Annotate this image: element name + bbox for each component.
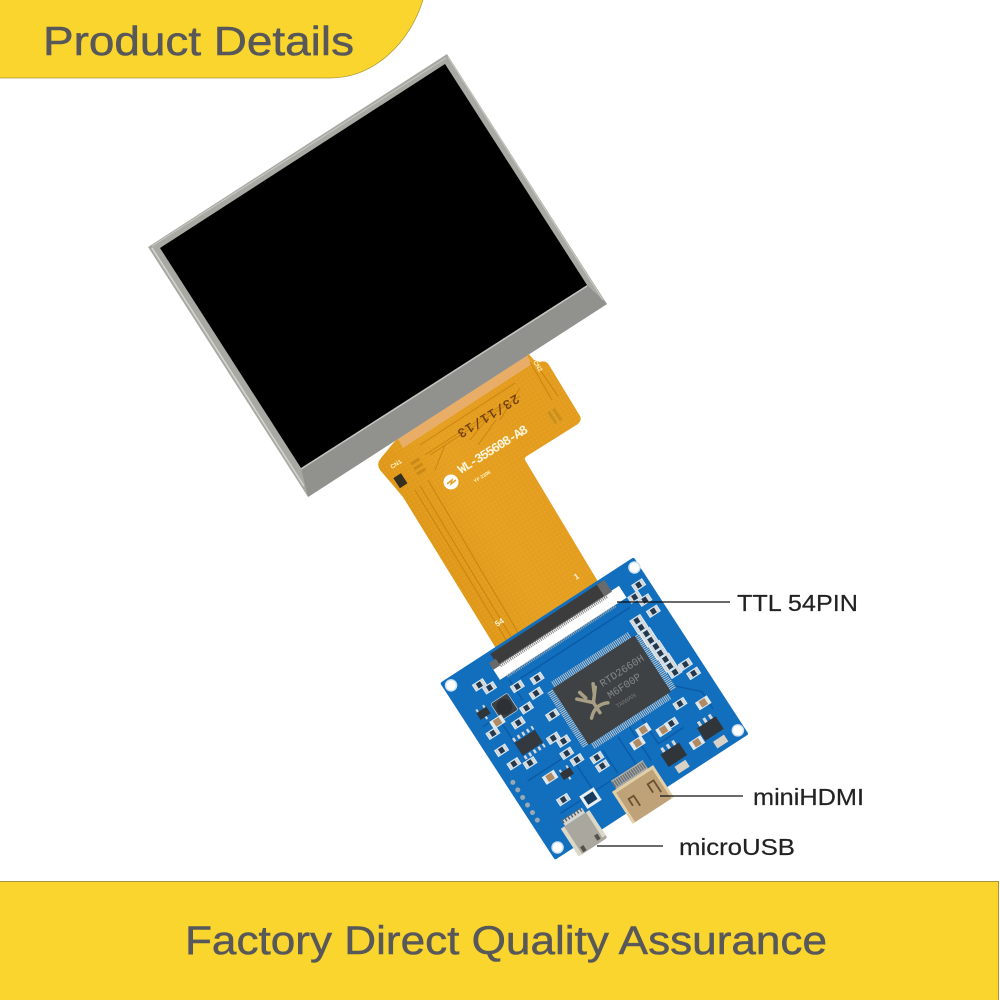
flexible ribbon cable: 1 <box>572 571 581 582</box>
header banner <box>0 0 423 78</box>
black screen <box>160 64 587 468</box>
ribbon traces <box>415 362 558 643</box>
blue PCB <box>440 557 749 860</box>
flexible ribbon cable <box>378 352 600 650</box>
resistor column <box>591 578 719 730</box>
HDMI controller chip: M6F00P <box>606 672 644 702</box>
HDMI controller chip: TAIWAN <box>615 693 638 710</box>
footer slogan: Factory Direct Quality Assurance <box>185 919 827 963</box>
flexible ribbon cable: CN1 <box>390 459 404 471</box>
flexible ribbon cable: CN2 <box>531 360 543 374</box>
FFC connector <box>485 575 627 681</box>
PCB traces <box>469 595 718 827</box>
callout: TTL 54PIN: TTL 54PIN <box>737 590 858 616</box>
heading: Product Details: Product Details <box>43 18 354 64</box>
chip text: RTD2660H <box>598 653 647 691</box>
callout: microUSB: microUSB <box>679 834 795 860</box>
edge test pads <box>509 779 541 824</box>
gold contacts <box>410 408 562 475</box>
HDMI controller chip <box>548 631 675 749</box>
power regulators <box>475 602 731 848</box>
metal frame <box>148 54 607 497</box>
driver board <box>440 557 756 870</box>
ribbon printed logo <box>444 474 458 490</box>
chip logo <box>575 683 610 719</box>
left side components <box>457 581 728 841</box>
microUSB connector <box>558 805 607 856</box>
miniHDMI connector <box>607 757 674 824</box>
SOIC chip <box>513 727 545 758</box>
inductor <box>491 693 518 721</box>
small chip on ribbon <box>393 473 407 488</box>
flexible ribbon cable: YF 2306 <box>473 469 492 485</box>
ribbon small labels: 54 <box>493 616 506 629</box>
footer banner <box>0 881 999 1000</box>
callout: miniHDMI: miniHDMI <box>753 784 864 810</box>
ribbon model text: WL-355608-A8 <box>455 422 531 477</box>
mounting holes <box>443 559 747 856</box>
silk pad block <box>579 787 602 809</box>
peach bond strip <box>398 355 532 448</box>
LCD display panel <box>148 54 607 497</box>
ribbon date text: 23/11/13 <box>455 391 522 440</box>
